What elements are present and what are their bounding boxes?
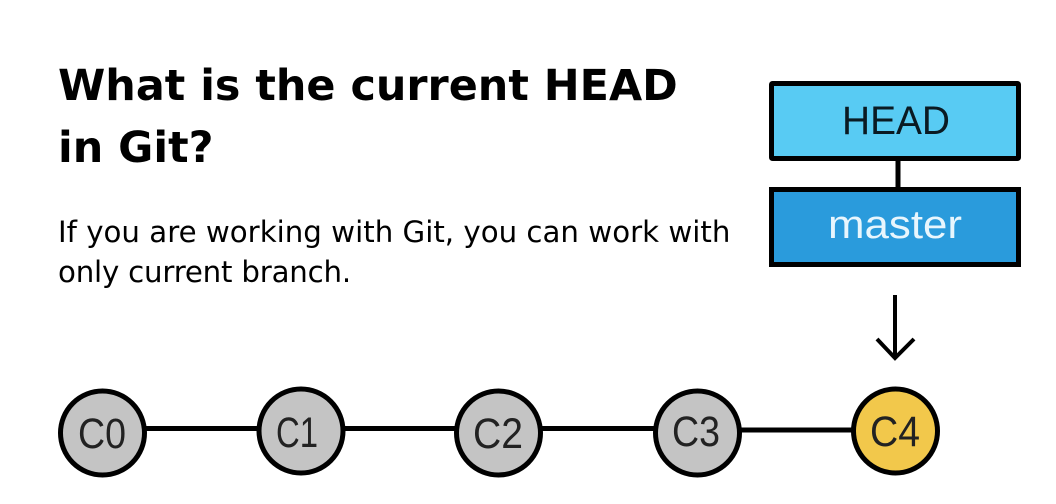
master box: master [828, 203, 962, 247]
title: What is the current HEAD [58, 61, 678, 111]
commit C1: C1 [276, 409, 318, 457]
body text: If you are working with Git, you can work with [58, 215, 730, 249]
commit C4 [854, 389, 938, 473]
HEAD box: HEAD [842, 99, 950, 143]
commit C4: C4 [870, 408, 920, 456]
body text: only current branch. [58, 255, 351, 289]
commit C0 [60, 391, 144, 475]
body text [58, 215, 730, 289]
commit C3: C3 [672, 408, 720, 456]
commit C2: C2 [473, 410, 523, 458]
commit line [146, 428, 854, 430]
master box [772, 190, 1018, 264]
commit C3 [656, 391, 740, 475]
connector: HEAD to master [896, 158, 900, 190]
commit C2 [456, 391, 540, 475]
HEAD box [772, 84, 1018, 158]
commit C0: C0 [78, 410, 126, 458]
arrow: master points to C4 [877, 295, 914, 358]
commit C1 [259, 389, 343, 473]
title [58, 61, 678, 173]
title: in Git? [58, 123, 213, 173]
